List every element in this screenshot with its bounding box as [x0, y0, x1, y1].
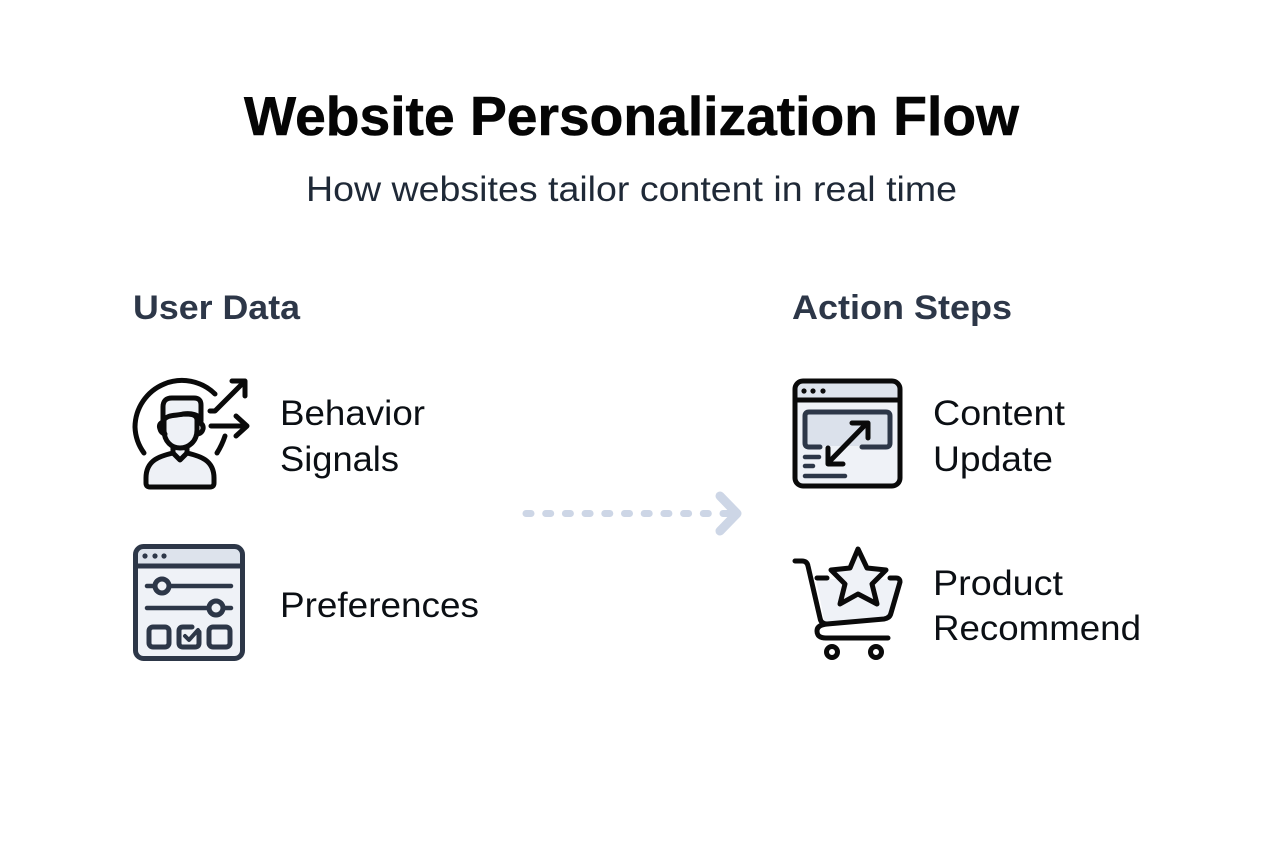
- title: Website Personalization Flow: [244, 85, 1019, 147]
- label: product recommend: [933, 564, 1141, 648]
- icon: preferences: [136, 546, 242, 658]
- heading: action steps: Action Steps: [792, 289, 1012, 327]
- label: content update: Update: [933, 440, 1053, 479]
- label: content update: [933, 394, 1065, 479]
- icon: product recommend: [795, 549, 900, 658]
- icon: content update: [795, 381, 900, 486]
- label: behavior signals: Behavior: [280, 394, 425, 433]
- icon: behavior signals: [135, 380, 247, 487]
- label: content update: Content: [933, 394, 1065, 433]
- label: behavior signals: Signals: [280, 440, 399, 479]
- heading: user data: User Data: [133, 289, 301, 327]
- subtitle: How websites tailor content in real time: [306, 170, 957, 209]
- arrow: flow from user data to action steps: [526, 496, 737, 531]
- label: product recommend: Product: [933, 564, 1063, 603]
- label: product recommend: Recommend: [933, 609, 1141, 648]
- label: preferences: Preferences: [280, 586, 479, 625]
- label: behavior signals: [280, 394, 425, 479]
